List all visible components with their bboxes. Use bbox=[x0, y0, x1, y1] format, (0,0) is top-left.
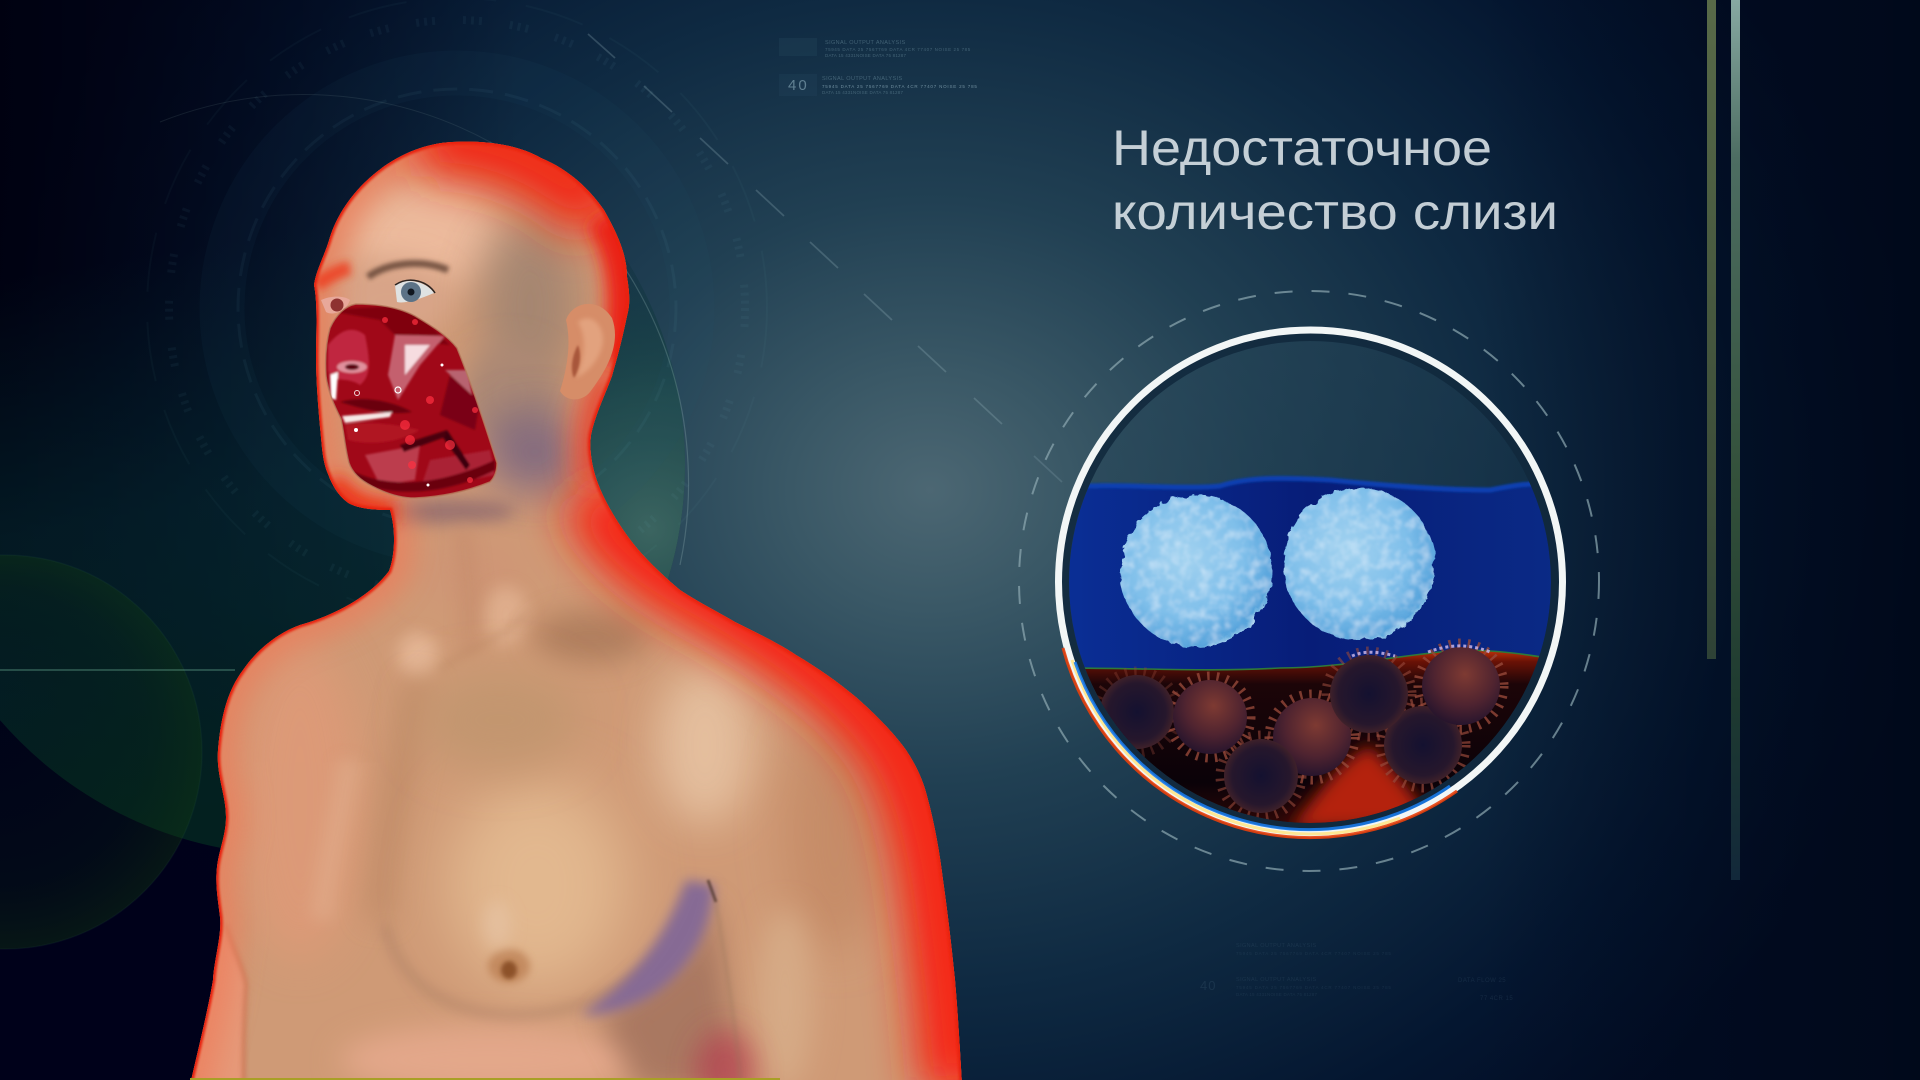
chromatic fringe bbox=[1063, 648, 1457, 838]
purple shadow under pectoral bbox=[580, 880, 714, 1015]
lens ring bbox=[1065, 337, 1555, 827]
mucus layer bbox=[1060, 478, 1560, 680]
HUD text: top: 75945 DATA 25 7567769 DATA 4CR 77407 NOISE 25 785 bbox=[822, 84, 978, 89]
HUD text: bottom: 75945 DATA 25 7567769 DATA 4CR 77407 NOISE 25 785 bbox=[1236, 951, 1392, 956]
lower fluid bbox=[1085, 651, 1539, 823]
HUD text: bottom: SIGNAL OUTPUT ANALYSIS bbox=[1236, 943, 1317, 949]
HUD text: bottom: 75945 DATA 25 7567769 DATA 4CR 77407 NOISE 25 785 bbox=[1236, 985, 1392, 990]
nipple bbox=[483, 901, 530, 983]
vertical bars bbox=[1707, 0, 1740, 880]
thin red edge bbox=[190, 142, 962, 1080]
skin and shading bbox=[192, 142, 962, 1080]
soft orange rim bbox=[190, 142, 962, 1080]
left fold bbox=[192, 938, 245, 1078]
lens: mucus diagram bbox=[1058, 330, 1562, 840]
HUD text: bottom: 77 4CR 15 bbox=[1480, 996, 1513, 1002]
HUD text: top: SIGNAL OUTPUT ANALYSIS bbox=[825, 40, 906, 46]
heading bbox=[1112, 120, 1558, 240]
neck and clavicle bbox=[398, 633, 438, 677]
HUD text: bottom: SIGNAL OUTPUT ANALYSIS bbox=[1236, 977, 1317, 983]
white cells bbox=[1120, 488, 1435, 647]
viruses bbox=[1096, 643, 1504, 817]
HUD text: top: DATA 15 4331NOISE DATA 75 81287 bbox=[825, 53, 906, 58]
HUD text: bottom: 40 bbox=[1200, 978, 1216, 993]
HUD text: top: 40 bbox=[788, 77, 809, 94]
chest bbox=[251, 660, 350, 943]
HUD text: top bbox=[779, 38, 978, 96]
eye and eyebrow bbox=[321, 264, 448, 314]
heading: Недостаточное bbox=[1112, 120, 1492, 176]
diagonal dashed line bbox=[588, 34, 1112, 530]
face cutout outline bbox=[326, 304, 497, 498]
HUD text: top: DATA 15 4331NOISE DATA 75 81287 bbox=[822, 90, 903, 95]
strong red zones bbox=[600, 490, 962, 1080]
dashed circle bbox=[1019, 291, 1599, 871]
HUD text: bottom bbox=[1200, 943, 1513, 1002]
dusky under-pec area bbox=[600, 895, 741, 1080]
human figure bbox=[190, 142, 962, 1080]
virus spikes above surface bbox=[1352, 646, 1490, 656]
lens backdrop bbox=[1060, 332, 1560, 832]
heading: количество слизи bbox=[1112, 184, 1558, 240]
exposed facial muscle bbox=[326, 304, 497, 498]
head shading bbox=[335, 175, 505, 295]
HUD text: top: 75945 DATA 25 7567769 DATA 4CR 77407 NOISE 25 785 bbox=[825, 47, 971, 52]
ear bbox=[560, 304, 615, 399]
HUD text: bottom: DATA FLOW 25 bbox=[1458, 978, 1506, 984]
bottom edge line bbox=[190, 1078, 780, 1080]
HUD text: top: SIGNAL OUTPUT ANALYSIS bbox=[822, 76, 903, 82]
decorative HUD rings around head bbox=[0, 0, 767, 670]
HUD text: bottom: DATA 15 4331NOISE DATA 75 81287 bbox=[1236, 992, 1317, 997]
